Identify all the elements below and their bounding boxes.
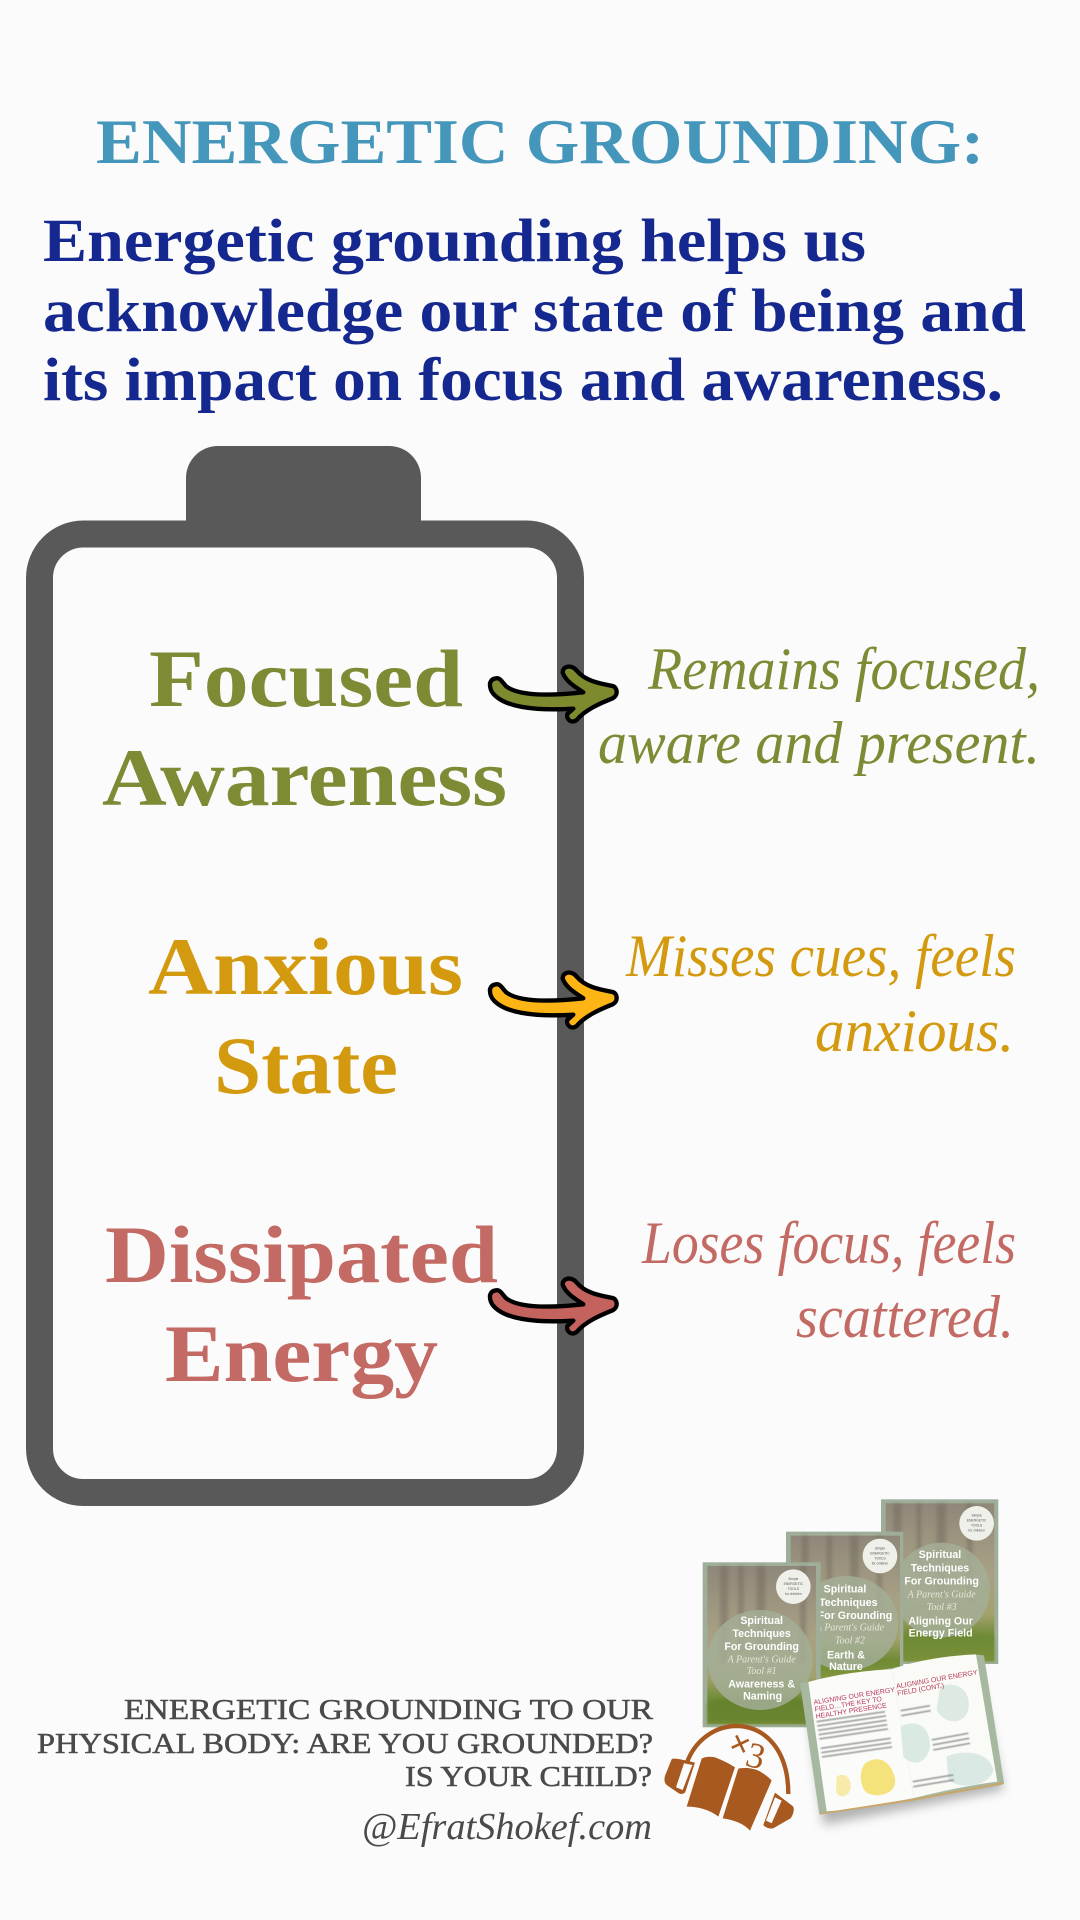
footer promo text: PHYSICAL BODY: ARE YOU GROUNDED? (37, 1728, 653, 1760)
booklet 2 cover: Nature (829, 1661, 863, 1673)
booklet 2 cover: ENERGETIC (870, 1551, 890, 1555)
description: anxious: Misses cues, feels (625, 923, 1016, 989)
arrow: anxious (490, 973, 617, 1027)
open booklet spread (800, 1654, 1004, 1825)
footer promo text (37, 1694, 654, 1793)
level label: Focused Awareness: Focused (149, 633, 463, 724)
description: anxious (625, 923, 1016, 1064)
booklet 2 cover: Earth & (827, 1650, 865, 1662)
booklet 3 cover: ENERGETIC (967, 1519, 987, 1523)
open booklet spread: HEALTHY PRESENCE (815, 1702, 888, 1721)
description: focused: Remains focused, (647, 636, 1040, 702)
description: anxious: anxious. (815, 998, 1014, 1064)
booklet 1 cover: For Grounding (724, 1641, 799, 1653)
level label: Focused Awareness (102, 633, 507, 823)
title: ENERGETIC GROUNDING: (96, 106, 984, 177)
icon: audiobook with headphones: 3 (742, 1734, 770, 1777)
booklet 2 cover (786, 1532, 903, 1688)
booklet 2 cover: Tool #2 (835, 1635, 865, 1646)
booklet 3 cover (881, 1499, 998, 1664)
booklet 3 cover: Tool #3 (927, 1602, 957, 1613)
level label: Anxious State: State (214, 1020, 398, 1111)
footer promo text: IS YOUR CHILD? (405, 1761, 652, 1793)
booklet 3 cover: Simple (972, 1514, 982, 1518)
arrow: focused (490, 667, 617, 721)
booklet 1 cover: for children (785, 1592, 802, 1596)
subtitle text block: acknowledge our state of being and (43, 278, 1026, 345)
description: dissipated (641, 1210, 1016, 1350)
description: dissipated: scattered. (796, 1284, 1014, 1350)
level label: Anxious State (148, 921, 463, 1111)
booklet 3 cover: Techniques (911, 1562, 969, 1574)
battery graphic (40, 446, 570, 1492)
booklet 2 cover: TOOLS (874, 1556, 886, 1560)
booklet 1 cover: ENERGETIC (784, 1582, 804, 1586)
icon: audiobook with headphones (664, 1722, 794, 1831)
booklet 1 cover: Tool #1 (747, 1666, 777, 1677)
booklet 3 cover: Energy Field (909, 1628, 973, 1640)
website handle: @EfratShokef.com (362, 1806, 652, 1848)
description: focused (598, 636, 1040, 776)
booklet 3 cover: Spiritual (919, 1549, 961, 1561)
booklet 1 cover: Spiritual (740, 1615, 783, 1627)
footer promo text: ENERGETIC GROUNDING TO OUR (124, 1694, 654, 1726)
subtitle text block: its impact on focus and awareness. (43, 347, 1003, 414)
level label: Dissipated Energy: Dissipated (105, 1209, 498, 1300)
level label: Dissipated Energy (105, 1209, 498, 1399)
booklet 1 cover: Simple (788, 1577, 799, 1581)
arrow: dissipated (490, 1279, 617, 1333)
subtitle text block (43, 208, 1026, 414)
level label: Focused Awareness: Awareness (102, 732, 507, 823)
booklet 3 cover: For Grounding (904, 1575, 979, 1587)
booklet 2 cover: Simple (875, 1546, 885, 1550)
booklet 2 cover: For Grounding (818, 1610, 892, 1622)
level label: Dissipated Energy: Energy (165, 1308, 438, 1399)
booklet 3 cover: Aligning Our (908, 1616, 973, 1628)
booklet 3 cover: TOOLS (971, 1524, 983, 1528)
open booklet spread: ALIGNING OUR ENERGY (813, 1687, 896, 1707)
booklet 1 cover: A Parent's Guide (727, 1655, 796, 1666)
booklet 2 cover: Techniques (819, 1597, 878, 1609)
booklet 3 cover: for children (968, 1529, 985, 1533)
open booklet spread: FIELD…THE KEY TO (814, 1696, 883, 1714)
booklet 2 cover: Spiritual (824, 1584, 866, 1596)
booklet 1 cover: Naming (743, 1690, 782, 1702)
booklet 2 cover: for children (872, 1561, 888, 1565)
subtitle text block: Energetic grounding helps us (43, 208, 866, 275)
icon: audiobook with headphones: × (724, 1722, 757, 1766)
booklet 1 cover (703, 1562, 821, 1727)
open booklet spread: FIELD (CONT.) (897, 1682, 945, 1698)
open booklet spread: ALIGNING OUR ENERGY (896, 1669, 978, 1691)
booklet 3 cover: A Parent's Guide (907, 1590, 976, 1601)
booklet 1 cover: Techniques (732, 1628, 791, 1640)
description: focused: aware and present. (598, 710, 1040, 776)
booklet 1 cover: TOOLS (788, 1587, 800, 1591)
booklet 1 cover: Awareness & (728, 1679, 795, 1691)
level label: Anxious State: Anxious (148, 921, 463, 1012)
booklet 2 cover: A Parent's Guide (815, 1623, 885, 1634)
description: dissipated: Loses focus, feels (641, 1210, 1016, 1276)
product image: guide booklets (664, 1499, 1004, 1831)
